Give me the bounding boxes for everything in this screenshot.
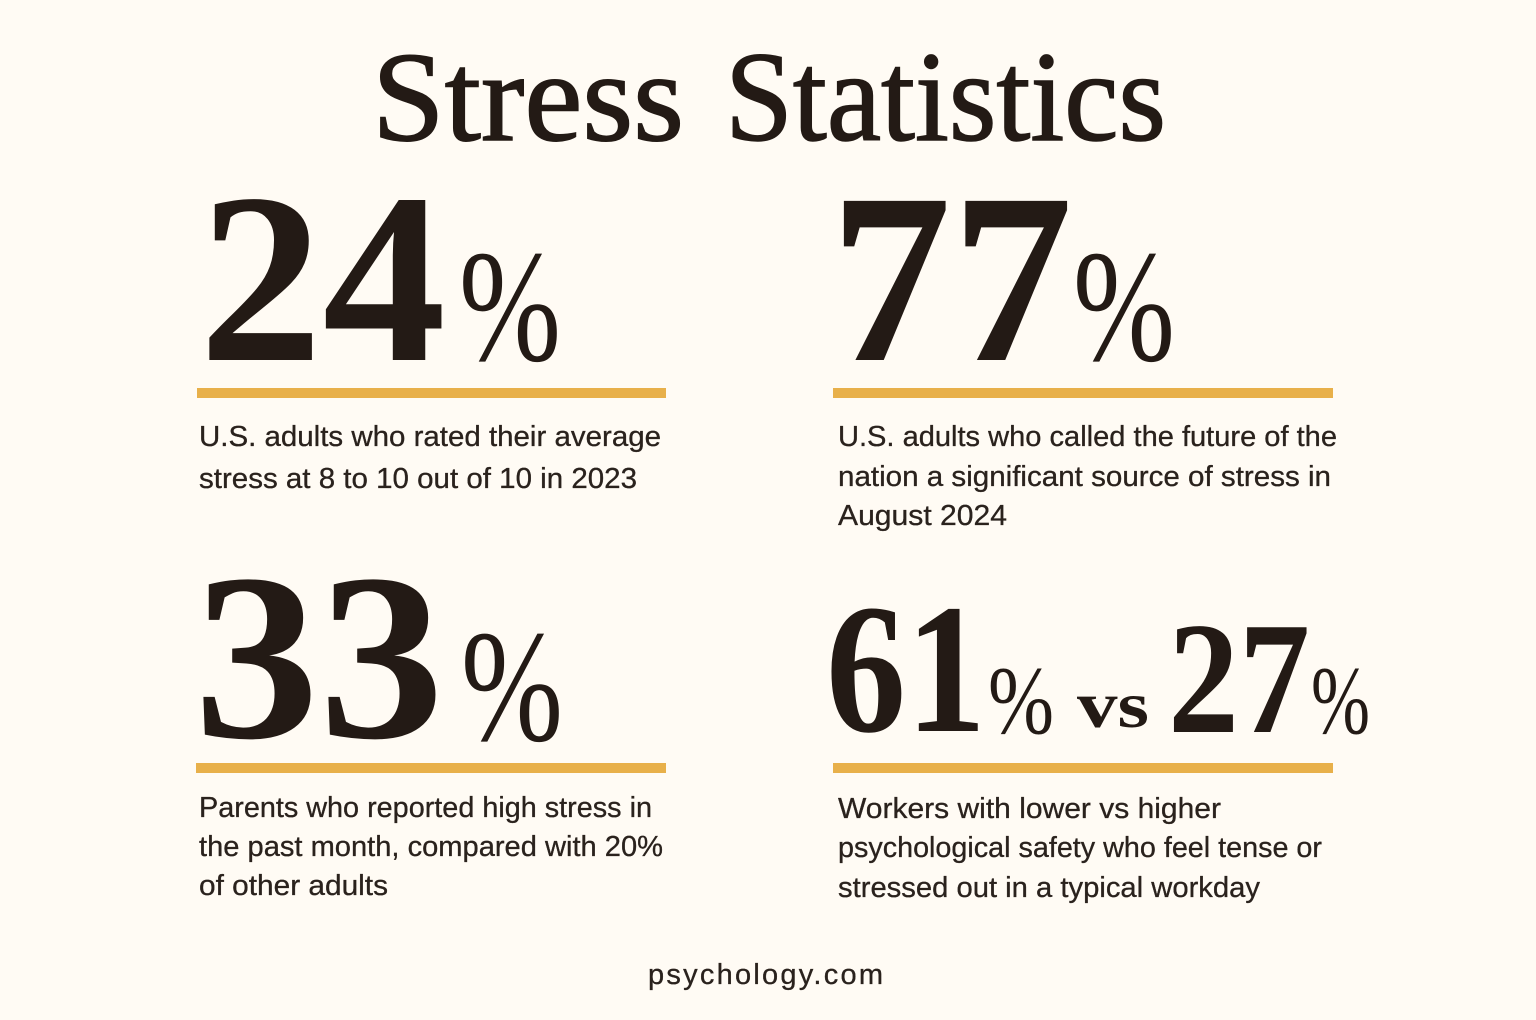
description xyxy=(199,421,661,495)
stat numbers: 61% vs 27%: % xyxy=(1311,647,1370,755)
description xyxy=(199,792,663,902)
description xyxy=(838,793,1322,904)
stat number: 33% xyxy=(194,526,563,789)
stat numbers: 61% vs 27% xyxy=(826,567,1370,772)
accent bar xyxy=(833,763,1333,773)
description: Parents who reported high stress in xyxy=(199,792,652,824)
source footer: psychology.com xyxy=(648,959,883,991)
description: the past month, compared with 20% xyxy=(199,831,663,863)
stat numbers: 61% vs 27%: 61 xyxy=(826,567,986,772)
description: psychological safety who feel tense or xyxy=(838,832,1322,864)
accent bar xyxy=(197,388,666,398)
stat number: 24%: 24 xyxy=(199,143,446,413)
stat number: 24% xyxy=(199,143,561,413)
title: Stress xyxy=(372,26,684,168)
panel: 33 percent xyxy=(194,526,666,902)
description: August 2024 xyxy=(838,500,1007,532)
stat number: 33%: % xyxy=(461,597,563,775)
description: U.S. adults who rated their average xyxy=(199,421,661,453)
description: stress at 8 to 10 out of 10 in 2023 xyxy=(199,463,637,495)
accent bar xyxy=(833,388,1333,398)
description: nation a significant source of stress in xyxy=(838,461,1331,493)
stat numbers: 61% vs 27%: vs xyxy=(1077,669,1149,742)
stat number: 77%: 77 xyxy=(830,143,1073,413)
panel: 77 percent xyxy=(830,143,1337,532)
description xyxy=(838,421,1337,532)
description: Workers with lower vs higher xyxy=(838,793,1221,825)
description: stressed out in a typical workday xyxy=(838,872,1260,904)
panel: 24 percent xyxy=(197,143,666,495)
stat number: 77%: % xyxy=(1073,217,1175,395)
accent bar xyxy=(196,763,666,773)
title: Statistics xyxy=(725,26,1166,168)
panel: 61 percent vs 27 percent xyxy=(826,567,1370,904)
stat numbers: 61% vs 27%: 27 xyxy=(1168,589,1310,767)
stat numbers: 61% vs 27%: % xyxy=(988,647,1054,755)
stat number: 33%: 33 xyxy=(194,526,444,789)
description: of other adults xyxy=(199,870,388,902)
stat number: 24%: % xyxy=(459,217,561,395)
description: U.S. adults who called the future of the xyxy=(838,421,1337,453)
